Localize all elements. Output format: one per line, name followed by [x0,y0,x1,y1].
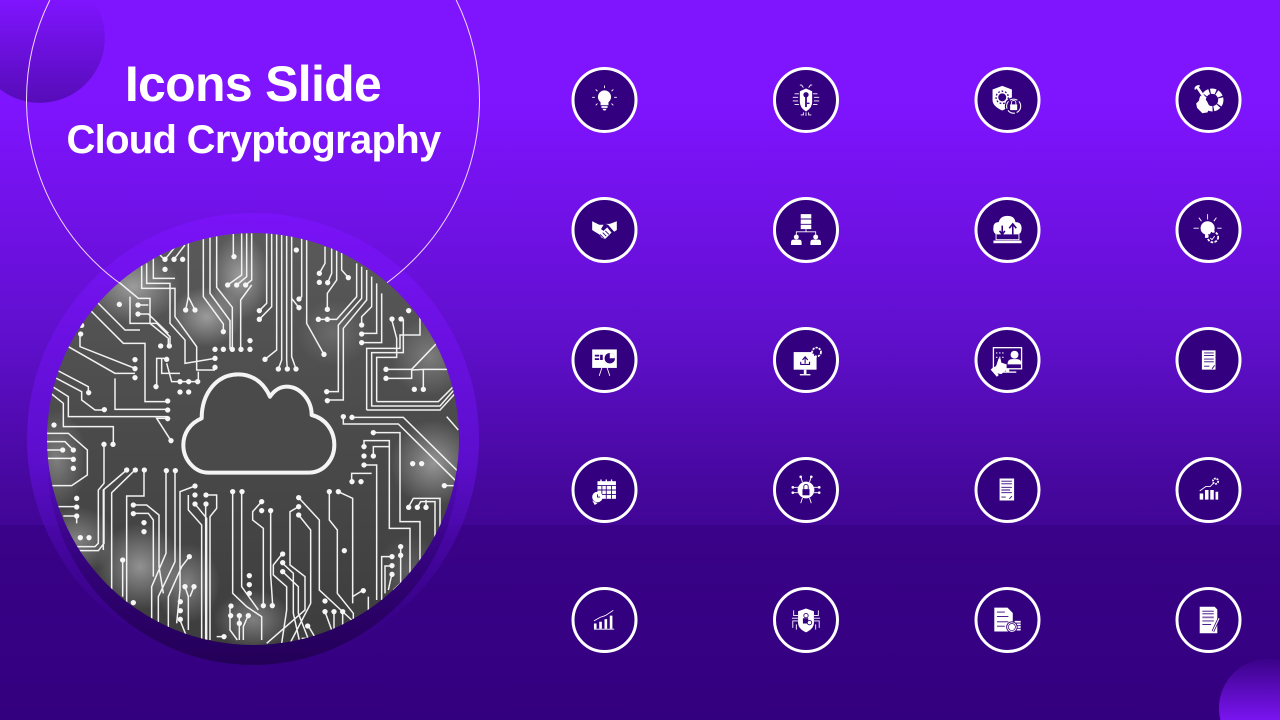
subtitle: Cloud Cryptography [66,118,442,162]
icon: wrench hand and gear [1177,68,1240,132]
icon: growth bars with gear [1177,458,1240,522]
icon: invoice with coin [976,588,1039,652]
icon: bulb with gear [1177,198,1240,262]
icon: light bulb [573,68,636,132]
icon: key in circuit shield [774,68,838,132]
icon: monitor person and hand [976,328,1039,392]
icon: circuit shield with lock [774,588,838,652]
halo behind disc [27,213,479,665]
decorative corner circle: top left [0,0,105,103]
icon: document with pen [1177,588,1240,652]
decorative corner circle: bottom right [1219,659,1280,720]
icon: presentation board [573,328,636,392]
disc shadow [47,253,459,665]
icon: handshake [573,198,636,262]
icon: report document [976,458,1039,522]
heading: Icons Slide: Icons Slide [125,56,381,112]
lower background band [0,525,1280,720]
icon: lock with circuit nodes [774,458,838,522]
icon grid [573,68,1240,652]
icon: calendar with clock [573,458,636,522]
icon: database and users [774,198,838,262]
icon: monitor upload gear [774,328,838,392]
icon: cloud transfer laptop [976,198,1039,262]
icon: cloud outline [183,374,334,473]
icon: shield gear with lock [976,68,1039,132]
icon: rising bar chart [573,588,636,652]
icon: document [1177,328,1240,392]
circuit board cloud image [47,233,459,645]
outline circle behind title [26,0,479,327]
